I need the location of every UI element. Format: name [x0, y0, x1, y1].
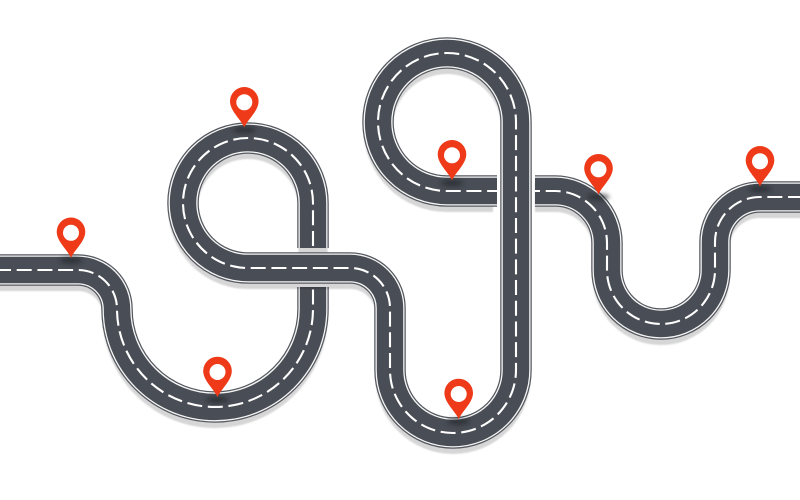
icon: location pin 5	[746, 146, 774, 192]
icon: location pin 3	[438, 140, 466, 186]
road section: left entry and lower curve	[0, 270, 313, 413]
icon: location pin 6	[444, 379, 473, 425]
road section: two loops and central valley	[183, 53, 516, 440]
icon: location pin 7	[203, 357, 232, 403]
road network	[0, 53, 800, 440]
road section: right exit with bend	[535, 191, 800, 330]
icon: location pin 4	[584, 154, 613, 200]
icon: location pin 2	[230, 87, 259, 134]
icon: location pin 1	[57, 218, 85, 264]
